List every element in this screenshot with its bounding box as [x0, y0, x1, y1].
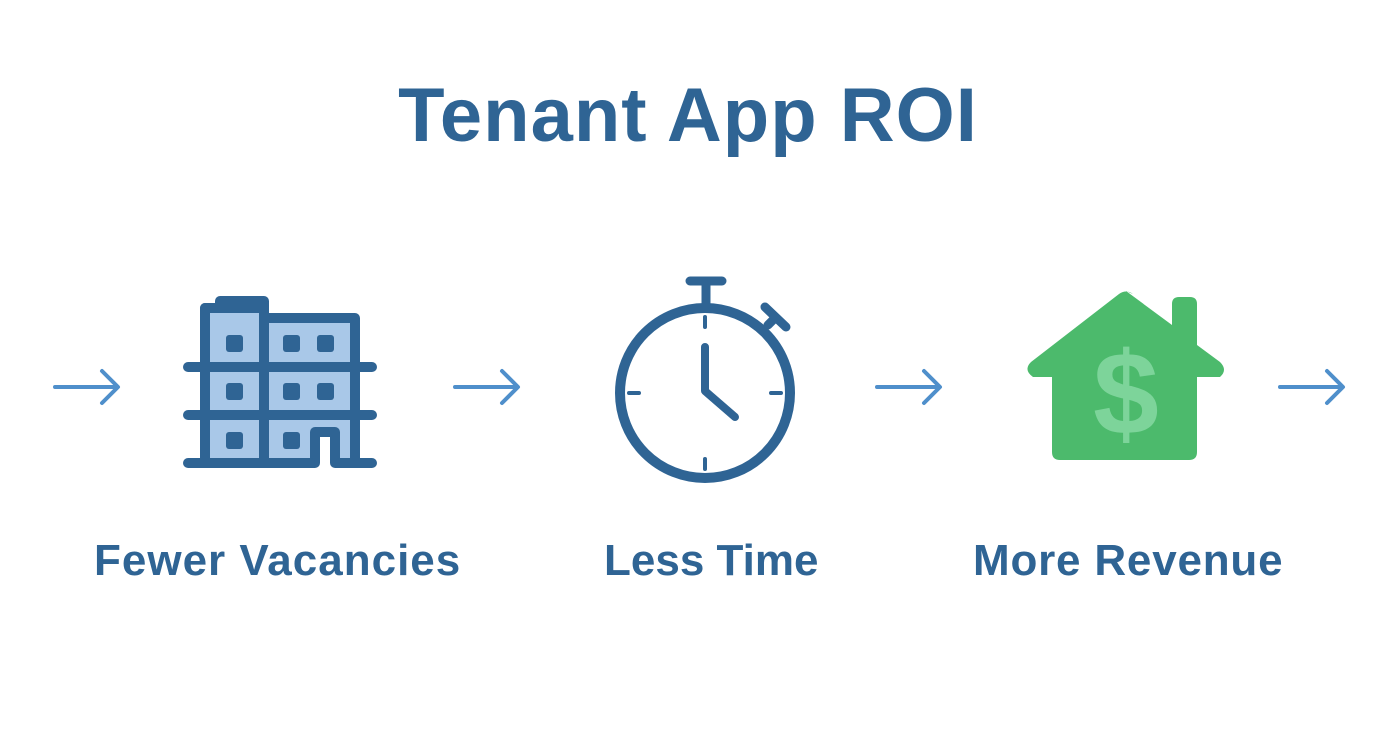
arrow 2 — [455, 371, 518, 403]
arrow 1 — [55, 371, 118, 403]
label: More Revenue: More Revenue — [973, 536, 1283, 585]
title: Tenant App ROI — [398, 73, 978, 158]
icon: house with dollar — [1027, 291, 1224, 460]
label: Fewer Vacancies: Fewer Vacancies — [94, 536, 461, 585]
arrow 3 — [877, 371, 940, 403]
label: Less Time: Less Time — [604, 536, 818, 585]
icon: house with dollar: $ — [1093, 328, 1159, 460]
icon: building — [188, 301, 372, 463]
icon: stopwatch — [620, 281, 790, 478]
arrow 4 — [1280, 371, 1343, 403]
